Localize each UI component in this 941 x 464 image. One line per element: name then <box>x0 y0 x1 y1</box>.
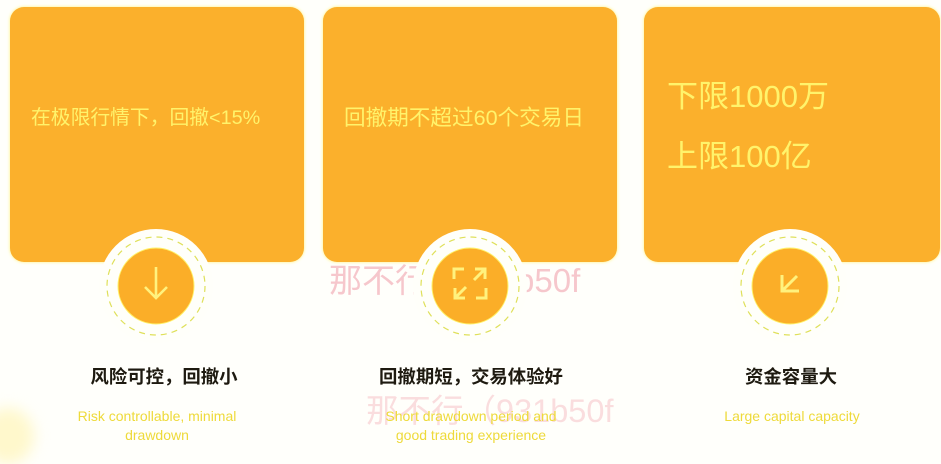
decorative corner glow <box>0 408 34 464</box>
text: period limit: 回撤期不超过60个交易日 <box>344 105 584 130</box>
text: drawdown limit: 在极限行情下，回撤<15% <box>31 107 260 129</box>
heading: risk: 风险可控，回撤小 <box>90 366 238 387</box>
subtitle: risk: drawdown <box>125 427 189 443</box>
subtitle: drawdown period <box>385 408 557 443</box>
subtitle: drawdown period: good trading experience <box>396 427 546 443</box>
text: capacity limits: 下限1000万 <box>667 79 829 114</box>
icon: expand circle <box>413 229 527 343</box>
icon: arrow circle <box>733 229 847 343</box>
subtitle: drawdown period: Short drawdown period and <box>385 408 557 424</box>
panel: risk card <box>10 7 304 262</box>
text: capacity limits <box>667 79 829 174</box>
heading: capacity: 资金容量大 <box>745 366 837 387</box>
subtitle: risk <box>78 408 236 443</box>
subtitle: risk: Risk controllable, minimal <box>78 408 236 424</box>
panel: capacity card <box>644 7 940 262</box>
subtitle: capacity: Large capital capacity <box>724 408 860 424</box>
watermark: upper: 那不行（931b50f <box>329 262 580 299</box>
icon: risk circle <box>99 229 213 343</box>
watermark: lower: 那不行（931b50f <box>366 393 613 429</box>
panel: drawdown period card <box>323 7 617 262</box>
text: capacity limits: 上限100亿 <box>667 139 812 174</box>
heading: drawdown period: 回撤期短，交易体验好 <box>379 366 563 387</box>
